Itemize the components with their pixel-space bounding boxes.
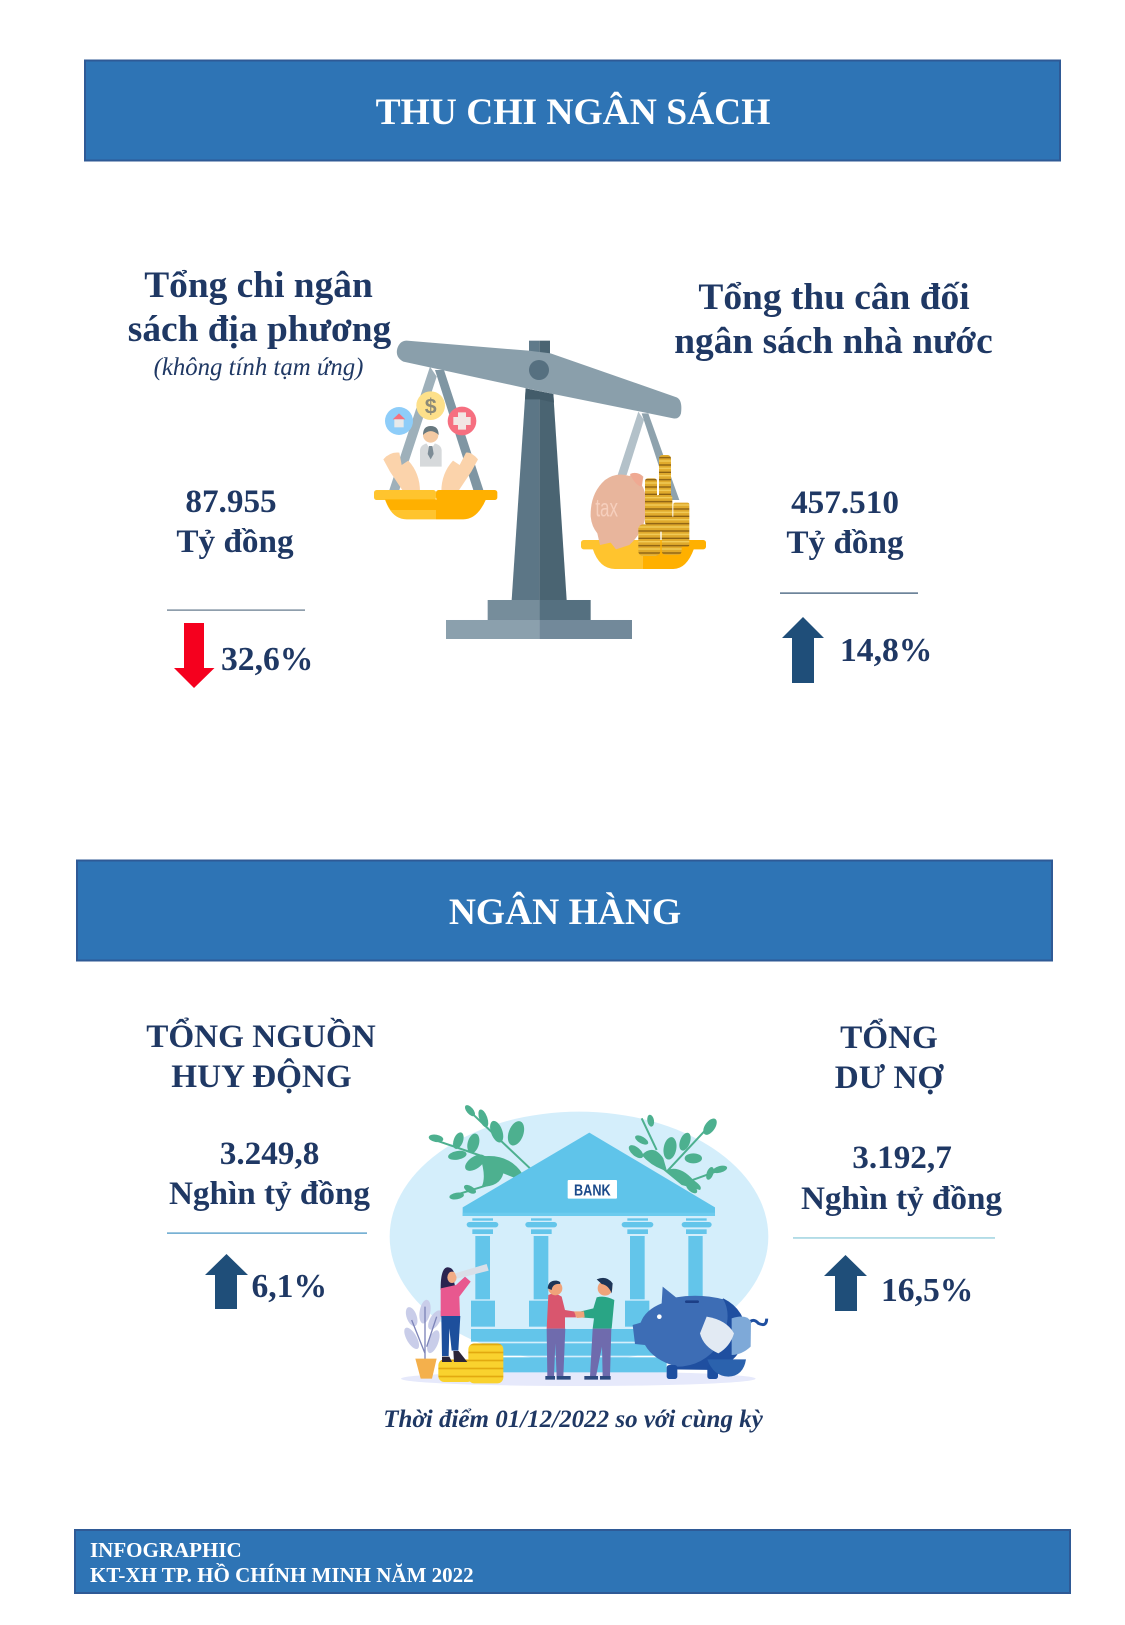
heading: Tổng chi ngân sách địa phương bbox=[128, 265, 392, 350]
value: 457.510 Tỷ đồng: 457.510 bbox=[791, 484, 899, 521]
bank building bbox=[463, 1133, 715, 1372]
left pan: people and services: $ bbox=[425, 394, 437, 418]
change: 16,5%: 16,5% bbox=[881, 1272, 973, 1309]
banner: THU CHI NGÂN SÁCH: THU CHI NGÂN SÁCH bbox=[376, 91, 770, 133]
heading: Tổng thu cân đối ngân sách nhà nước: Tổng thu cân đối bbox=[698, 277, 970, 318]
right pan strings bbox=[618, 412, 644, 475]
coin stacks bbox=[438, 1343, 503, 1383]
value: 87.955 Tỷ đồng: Tỷ đồng bbox=[176, 523, 294, 560]
heading: TỔNG NGUỒN HUY ĐỘNG bbox=[146, 1016, 376, 1095]
icon: balance scale bbox=[374, 341, 706, 639]
value: 457.510 Tỷ đồng bbox=[786, 484, 904, 561]
left pan strings bbox=[389, 367, 437, 490]
panel: total mobilized capital bbox=[146, 1016, 376, 1309]
arrow: up bbox=[782, 617, 824, 683]
value: 3.249,8 Nghìn tỷ đồng: 3.249,8 bbox=[220, 1135, 319, 1172]
banner: NGÂN HÀNG bbox=[77, 860, 1052, 960]
value: 87.955 Tỷ đồng: 87.955 bbox=[185, 483, 277, 520]
panel: total outstanding loans bbox=[793, 1017, 1002, 1311]
heading: Tổng chi ngân sách địa phương: sách địa phương bbox=[128, 309, 392, 350]
right foliage bbox=[627, 1114, 728, 1195]
piggy bank bbox=[633, 1287, 767, 1379]
arrow: up bbox=[824, 1255, 867, 1311]
heading: TỔNG DƯ NỢ bbox=[835, 1017, 944, 1096]
arrow: up bbox=[205, 1254, 248, 1309]
footer bar: KT-XH TP. HỒ CHÍNH MINH NĂM 2022 bbox=[90, 1563, 474, 1587]
panel: total state budget revenue bbox=[674, 277, 993, 683]
scale beam bbox=[397, 341, 681, 418]
heading: TỔNG NGUỒN HUY ĐỘNG: TỔNG NGUỒN bbox=[146, 1016, 376, 1055]
note: excluding advances: (không tính tạm ứng) bbox=[154, 354, 363, 381]
heading: Tổng chi ngân sách địa phương: Tổng chi ngân bbox=[144, 265, 373, 306]
background blob bbox=[390, 1112, 768, 1362]
change: 14,8%: 14,8% bbox=[840, 632, 932, 669]
caption: time note: Thời điểm 01/12/2022 so với cùng kỳ bbox=[383, 1406, 764, 1433]
value: 3.249,8 Nghìn tỷ đồng: Nghìn tỷ đồng bbox=[169, 1175, 370, 1212]
banner: NGÂN HÀNG: NGÂN HÀNG bbox=[449, 891, 681, 933]
left pan: people and services bbox=[374, 391, 497, 519]
right pan: tax piggy bank and coins bbox=[581, 455, 706, 569]
value: 3.192,7 Nghìn tỷ đồng: 3.192,7 bbox=[852, 1139, 952, 1176]
right pan: tax piggy bank and coins: tax bbox=[595, 496, 618, 523]
change: 32,6%: 32,6% bbox=[221, 641, 313, 678]
banner: THU CHI NGÂN SÁCH bbox=[85, 60, 1060, 160]
arrow: down red bbox=[174, 623, 214, 688]
change: 6,1%: 6,1% bbox=[252, 1268, 327, 1305]
heading: TỔNG DƯ NỢ: DƯ NỢ bbox=[835, 1059, 944, 1096]
scale column bbox=[446, 388, 632, 639]
two men shaking hands bbox=[545, 1278, 614, 1380]
panel: total local budget spending bbox=[128, 265, 392, 688]
value: 3.192,7 Nghìn tỷ đồng bbox=[801, 1139, 1002, 1217]
left foliage bbox=[428, 1103, 530, 1201]
value: 3.192,7 Nghìn tỷ đồng: Nghìn tỷ đồng bbox=[801, 1180, 1002, 1217]
value: 87.955 Tỷ đồng bbox=[176, 483, 294, 560]
footer bar: INFOGRAPHIC bbox=[90, 1538, 242, 1562]
heading: Tổng thu cân đối ngân sách nhà nước bbox=[674, 277, 993, 362]
bank sign: BANK bbox=[574, 1183, 611, 1200]
heading: TỔNG NGUỒN HUY ĐỘNG: HUY ĐỘNG bbox=[171, 1057, 352, 1095]
illustration: bank bbox=[390, 1103, 768, 1386]
ground shadow bbox=[401, 1371, 756, 1386]
value: 3.249,8 Nghìn tỷ đồng bbox=[169, 1135, 370, 1212]
heading: Tổng thu cân đối ngân sách nhà nước: ngân sách nhà nước bbox=[674, 321, 993, 362]
plant in pot bbox=[401, 1299, 445, 1379]
woman with telescope bbox=[441, 1264, 489, 1362]
footer bar bbox=[75, 1530, 1070, 1593]
value: 457.510 Tỷ đồng: Tỷ đồng bbox=[786, 524, 904, 561]
heading: TỔNG DƯ NỢ: TỔNG bbox=[840, 1017, 938, 1056]
